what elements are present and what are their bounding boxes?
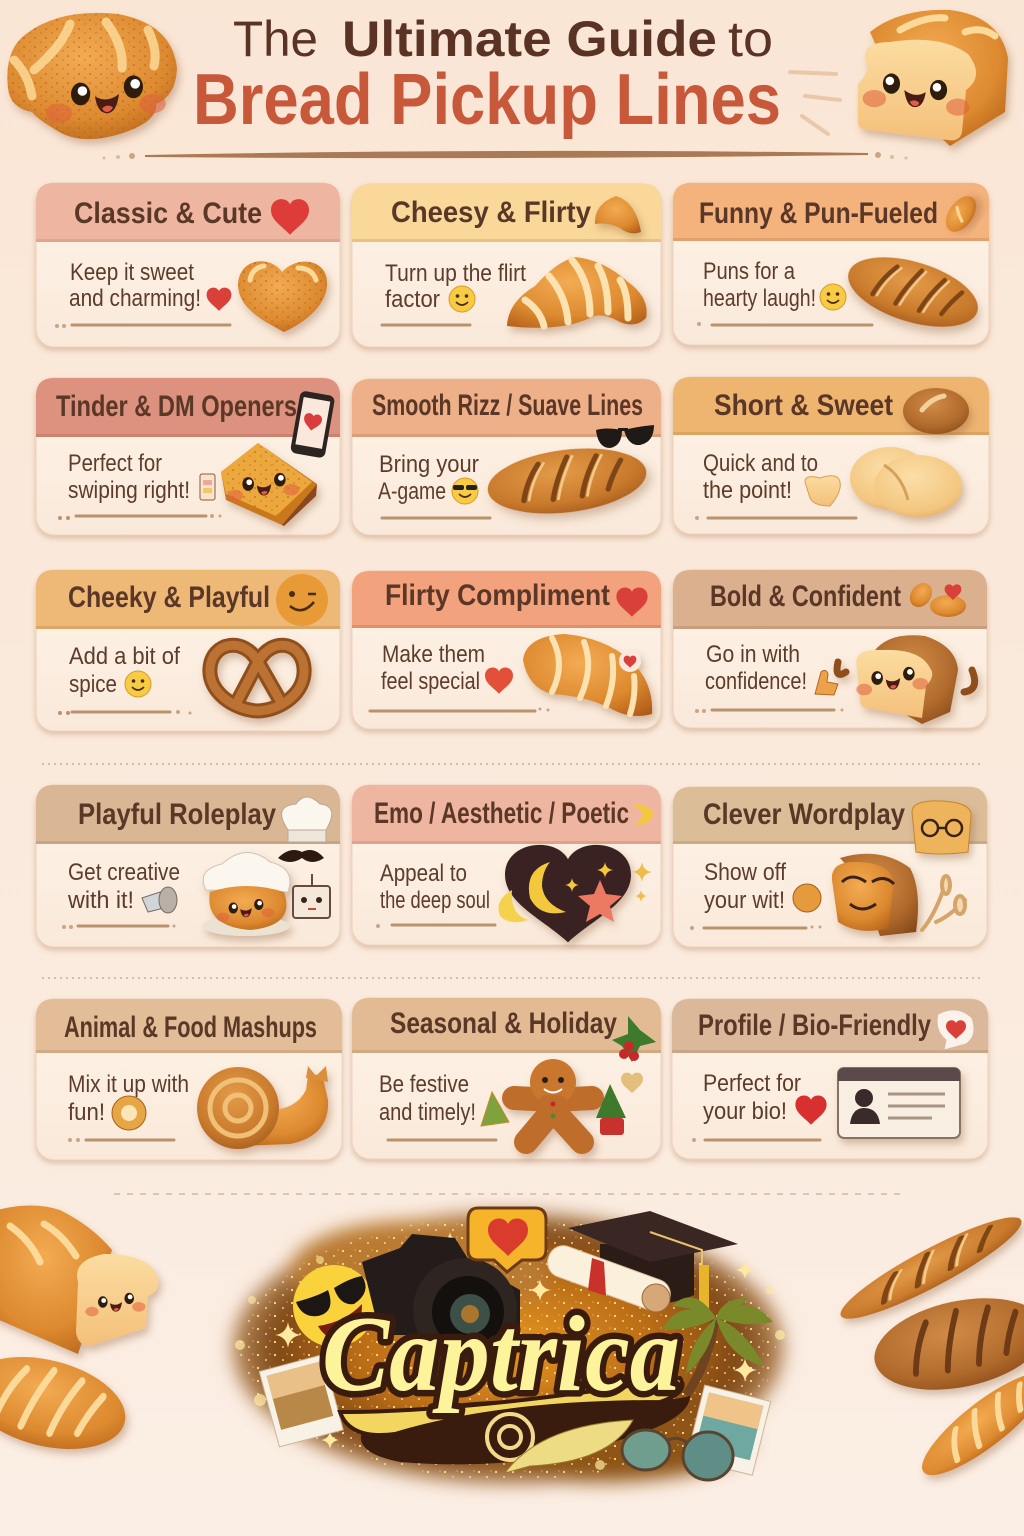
icon: gingerbread man <box>514 1059 592 1142</box>
title divider <box>102 152 908 160</box>
panel: Tinder & DM Openers <box>36 378 340 535</box>
icon: heart <box>271 199 309 235</box>
footer divider <box>114 1193 900 1195</box>
row divider <box>42 977 980 979</box>
emoji with sunglasses <box>293 1265 375 1347</box>
icon: gold heart <box>621 1073 643 1093</box>
panel: Flirty Compliment: Flirty Compliment <box>385 579 610 612</box>
icon: toast heart <box>805 476 840 506</box>
diploma scroll <box>543 1241 675 1315</box>
title: to <box>728 11 773 67</box>
icon: toast with glasses <box>912 801 971 854</box>
title: Ultimate Guide <box>342 11 717 67</box>
panel: Short & Sweet <box>673 377 989 534</box>
text: and charming! <box>69 285 201 312</box>
icon: dark heart with moon <box>505 845 631 942</box>
panel: Cheeky & Playful: Add a bit of <box>69 643 180 670</box>
panel: Smooth Rizz / Suave Lines: A-game <box>378 478 446 505</box>
icon: sunglasses <box>596 425 654 448</box>
title <box>193 11 781 140</box>
lower dark loop behind logotype <box>361 1396 690 1464</box>
panel: Seasonal & Holiday <box>352 998 661 1159</box>
heart speech bubble <box>468 1208 546 1272</box>
icon: mini croissant <box>595 196 641 233</box>
panel: Cheesy & Flirty <box>352 184 661 347</box>
palm tree <box>662 1297 773 1395</box>
header <box>36 183 340 242</box>
panel: Emo / Aesthetic / Poetic: the deep soul <box>380 887 490 914</box>
icon: footer right baguette <box>832 1204 1024 1332</box>
icon: toast mascot <box>832 854 918 936</box>
panel: Playful Roleplay: with it! <box>67 887 134 914</box>
icon: footer right dark loaf <box>866 1284 1024 1404</box>
icon: speech heart <box>937 1010 974 1050</box>
text: Keep it sweet <box>70 259 194 286</box>
panel: Funny & Pun-Fueled: hearty laugh! <box>703 285 816 312</box>
panel: Animal & Food Mashups: Mix it up with <box>68 1071 189 1098</box>
panel: Cheesy & Flirty: factor <box>385 286 440 313</box>
panel: Playful Roleplay: Playful Roleplay <box>78 798 276 831</box>
title: Bread Pickup Lines <box>193 60 781 140</box>
icon: footer left loaf with face <box>0 1205 158 1354</box>
icon: footer right lower baguette <box>910 1359 1024 1489</box>
icon: snail bread <box>197 1066 328 1149</box>
panel: Tinder & DM Openers: Tinder & DM Openers <box>56 390 297 423</box>
panel: Emo / Aesthetic / Poetic: Emo / Aesthetic / Poetic <box>374 797 629 830</box>
icon: right toast mascot <box>858 10 1008 146</box>
panel: Bold & Confident: confidence! <box>705 668 807 695</box>
logotype: Captrica <box>322 1295 680 1414</box>
camera <box>362 1234 520 1362</box>
panel: Cheesy & Flirty: Turn up the flirt <box>385 260 526 287</box>
panel: Flirty Compliment: Make them <box>382 641 485 668</box>
sparkles <box>235 1232 785 1470</box>
icon: pretzel <box>210 645 304 711</box>
icon: thumb <box>815 670 838 695</box>
icon: party hat <box>481 1092 509 1126</box>
panel: Classic & Cute <box>36 183 340 347</box>
icon: emoji <box>449 286 475 312</box>
swoosh <box>340 1378 682 1435</box>
panel: Animal & Food Mashups: Animal & Food Mashups <box>64 1011 317 1044</box>
icon: ID card <box>838 1068 960 1138</box>
panel: Flirty Compliment <box>352 571 661 729</box>
icon: orange emoji <box>276 574 328 626</box>
panel: Tinder & DM Openers: swiping right! <box>68 477 190 504</box>
title: The <box>233 11 318 67</box>
icon: mini phone <box>200 474 215 500</box>
icon: rolls and heart <box>905 579 966 617</box>
panel: Smooth Rizz / Suave Lines: Smooth Rizz / Suave Lines <box>372 389 643 422</box>
panel: Short & Sweet: Quick and to <box>703 450 818 477</box>
panel: Funny & Pun-Fueled: Funny & Pun-Fueled <box>699 197 938 230</box>
panel: Emo / Aesthetic / Poetic <box>352 785 661 945</box>
panel: Clever Wordplay: Show off <box>704 859 786 886</box>
panel: Cheesy & Flirty: Cheesy & Flirty <box>391 196 591 229</box>
icon: bread square mascot <box>221 443 317 526</box>
panel: Cheeky & Playful <box>36 570 340 731</box>
icon: footer left lower bread <box>0 1342 135 1464</box>
panel: Cheeky & Playful: Cheeky & Playful <box>68 581 270 614</box>
icon: holly <box>612 1016 656 1062</box>
panel: Clever Wordplay: your wit! <box>704 887 785 914</box>
panel: Profile / Bio-Friendly: Profile / Bio-Friendly <box>698 1009 931 1042</box>
panel: Seasonal & Holiday: Seasonal & Holiday <box>390 1007 617 1040</box>
icon: wheat <box>922 876 965 930</box>
panel: Seasonal & Holiday: Be festive <box>379 1071 469 1098</box>
icon: heart bread <box>238 261 327 332</box>
aperture icon <box>487 1414 533 1460</box>
panel: Smooth Rizz / Suave Lines: Bring your <box>379 451 479 478</box>
icon: phone <box>290 390 335 458</box>
panel: Animal & Food Mashups <box>36 999 342 1160</box>
panel: Profile / Bio-Friendly: Perfect for <box>703 1070 801 1097</box>
icon: robot toast <box>293 874 330 918</box>
icon: baguette <box>484 440 650 522</box>
panel: Tinder & DM Openers: Perfect for <box>68 450 162 477</box>
panel: Profile / Bio-Friendly <box>672 999 988 1159</box>
header: Classic & Cute <box>74 197 262 230</box>
icon: crescent <box>630 804 654 825</box>
row divider <box>42 763 980 765</box>
feather <box>505 1420 633 1473</box>
panel: Flirty Compliment: feel special <box>381 668 480 695</box>
logo: Captrica <box>232 1208 785 1484</box>
panel: Bold & Confident: Go in with <box>706 641 800 668</box>
icon: small heart <box>207 288 231 311</box>
panel: Short & Sweet: Short & Sweet <box>714 389 893 422</box>
icon: heart face <box>485 668 513 694</box>
icon: left bread mascot <box>7 13 177 139</box>
icon: small tool <box>142 887 177 913</box>
panel: Clever Wordplay: Clever Wordplay <box>703 798 905 831</box>
glow blob <box>232 1212 784 1484</box>
panel: Clever Wordplay <box>673 787 987 947</box>
panel: Bold & Confident <box>673 570 987 728</box>
panel: Profile / Bio-Friendly: your bio! <box>703 1098 787 1125</box>
icon: chef hat and moustache <box>278 797 332 862</box>
icon: pale buns <box>850 447 962 517</box>
panel: Emo / Aesthetic / Poetic: Appeal to <box>380 860 467 887</box>
panel: Bold & Confident: Bold & Confident <box>710 580 901 613</box>
icon: bread loaf <box>840 244 986 340</box>
icon: croissant <box>507 257 647 328</box>
photo left <box>259 1354 343 1447</box>
sunglasses <box>622 1430 733 1480</box>
graduation cap <box>568 1211 738 1307</box>
text <box>69 259 201 312</box>
icon: bun <box>903 388 969 434</box>
icon: mini loaf <box>940 191 982 237</box>
panel: Seasonal & Holiday: and timely! <box>379 1099 476 1126</box>
icon: croissant with heart <box>523 634 652 716</box>
icon: small bun <box>112 1096 146 1130</box>
icon: cool emoji <box>452 478 478 504</box>
icon: tree <box>596 1084 626 1135</box>
icon: cookie <box>793 884 821 912</box>
speed lines <box>790 72 840 134</box>
panel: Funny & Pun-Fueled <box>673 183 989 345</box>
panel: Playful Roleplay: Get creative <box>68 859 180 886</box>
panel: Animal & Food Mashups: fun! <box>68 1099 105 1126</box>
icon: chef bread mascot <box>202 852 290 936</box>
panel: Playful Roleplay <box>36 785 340 947</box>
photo right <box>686 1385 771 1475</box>
panel: Smooth Rizz / Suave Lines <box>352 379 661 535</box>
panel: Cheeky & Playful: spice <box>69 671 117 698</box>
icon: toast mascot with arms <box>837 635 975 724</box>
panel: Funny & Pun-Fueled: Puns for a <box>703 258 796 285</box>
panel: Short & Sweet: the point! <box>703 477 792 504</box>
icon: small moon and stars <box>498 862 652 922</box>
